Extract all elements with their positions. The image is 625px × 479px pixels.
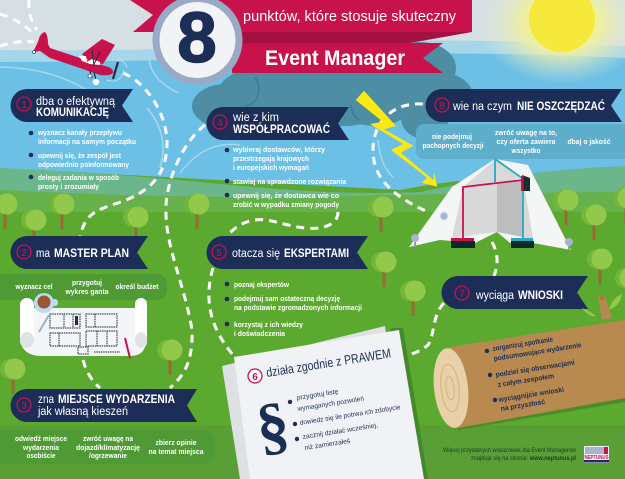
logo: Neptunus (584, 446, 609, 463)
header ribbon bottom (232, 43, 443, 73)
badge: number 8: 8 (177, 0, 217, 78)
section 4 bullets: zrobić w wypadku zmiany pogody (233, 200, 340, 209)
section 6 heading: 6 (252, 372, 258, 383)
section 8 tips: dbaj o jakość (568, 137, 610, 146)
banner 8 (426, 89, 622, 122)
section 7 bullets: zorganizuj spotkanie (492, 335, 554, 353)
header ribbon top (130, 0, 472, 32)
ribbon fold (232, 32, 472, 43)
section 7 bullets (485, 335, 582, 413)
section 3 tips: dojazd/klimatyzację (76, 443, 140, 452)
section 6 heading (248, 345, 392, 383)
icon: paragraph sign: § (251, 388, 294, 463)
section 8 tips: pochopnych decyzji (422, 141, 484, 150)
banner 3: 3 (21, 401, 27, 412)
banner 5: 5 (216, 248, 222, 259)
footer note (443, 448, 577, 462)
section 1 bullets: prosty i zrozumiały (38, 182, 100, 191)
section 7 bullets: z całym zespołem (497, 371, 555, 389)
section 4 bullets (225, 145, 347, 209)
section 3 tips: osobiście (26, 451, 56, 460)
badge: number 8 (152, 0, 242, 85)
section 7 bullets: wyciągnijcie wnioski (497, 385, 565, 404)
banner 2: ma (36, 248, 51, 260)
panel: section 6 paper sheets (222, 326, 428, 479)
section 6 bullets: zacznij działać wcześniej, (302, 422, 378, 441)
logo: Neptunus: NEPTUNUS (584, 455, 609, 461)
illustration: floor plan on table (20, 293, 147, 358)
section 5 bullets: poznaj ekspertów (234, 280, 289, 289)
section 1 bullets: wyznacz kanały przepływu (37, 128, 122, 137)
banner 8: 8 (439, 101, 445, 112)
illustration: wooden log (430, 294, 625, 430)
icon: lightning bolt (356, 91, 437, 187)
section 1 bullets: odpowiednio poinformowany (38, 160, 130, 169)
section 6 bullets: niż zamierzałeś (304, 438, 351, 452)
section 5 bullets: korzystaj z ich wiedzy (234, 320, 304, 329)
banner 5 (207, 236, 368, 269)
section 6 heading: działa zgodnie z PRAWEM (265, 345, 392, 380)
icon: storm cloud (192, 42, 473, 139)
heading: Event Manager: Event Manager (265, 47, 405, 70)
banner 4: 4 (217, 118, 223, 129)
footer note: Więcej przydatnych wskazówek dla Event Managerów (443, 448, 577, 454)
section 1 bullets: deleguj zadania w sposób (38, 173, 119, 182)
banner 1 (11, 89, 133, 122)
banner 2: 2 (21, 248, 27, 259)
section 3 tips: /ogrzewanie (89, 451, 127, 460)
banner 8: NIE OSZCZĘDZAĆ (517, 100, 605, 113)
footer note: znajduje się na stronie: www.neptunus.pl (471, 456, 576, 462)
icon: tent (409, 159, 573, 250)
banner 4: wie z kim (232, 112, 279, 124)
section 5 bullets (225, 280, 362, 338)
section 3 tips: odwiedź miejsce (15, 434, 67, 443)
section 2 tips: określ budżet (116, 282, 159, 291)
section 8 tips: wszystko (511, 146, 541, 155)
section 2 tips (15, 278, 159, 296)
section 7 bullets: podsumowujące wydarzenie (493, 340, 582, 363)
section 1 bullets: informacji na samym początku (38, 137, 136, 146)
icon: sun (529, 0, 595, 52)
section 1 bullets: upewnij się, że zespół jest (38, 151, 122, 160)
section 6 bullets: przygotuj listę (296, 388, 339, 402)
trees (0, 188, 625, 394)
banner 2: MASTER PLAN (54, 248, 129, 260)
banner 4: WSPÓŁPRACOWAĆ (233, 123, 330, 136)
section 7 bullets: na przyszłość (500, 397, 546, 413)
panel: section 8 backdrop (416, 124, 625, 159)
section 5 bullets: podejmuj sam ostateczną decyzję (234, 294, 340, 303)
section 3 tips: zwróć uwagę na (83, 434, 134, 443)
section 3 tips: wydarzenia (22, 443, 60, 452)
section 3 tips: na temat miejsca (148, 447, 204, 456)
banner 7: WNIOSKI (518, 290, 563, 302)
section 2 tips: wykres ganta (65, 287, 109, 296)
section 4 bullets: przestrzegają krajowych (233, 154, 309, 163)
banner 7: wyciąga (475, 290, 515, 302)
banner 1: KOMUNIKACJĘ (36, 107, 109, 119)
section 8 tips (422, 128, 610, 155)
section 6 bullets: wymaganych pozwoleń (296, 396, 365, 413)
section 2 tips: wyznacz cel (15, 282, 53, 291)
section 7 bullets: podziel się obserwacjami (495, 358, 575, 379)
banner 3: MIEJSCE WYDARZENIA (58, 394, 175, 406)
section 8 tips: nie podejmuj (432, 132, 472, 141)
banner 3: jak własną kieszeń (37, 406, 128, 418)
section 5 bullets: na podstawie zgromadzonych informacji (234, 303, 362, 312)
panel: section 2 backdrop (0, 274, 167, 300)
section 4 bullets: wybieraj dostawców, którzy (232, 145, 326, 154)
banner 7 (442, 276, 588, 309)
section 4 bullets: upewnij się, że dostawca wie co (233, 191, 340, 200)
section 6 bullets: dowiedz się ile potrwa ich zdobycie (299, 404, 401, 427)
section 4 bullets: stawiaj na sprawdzone rozwiązania (233, 177, 347, 186)
section 8 tips: czy oferta zawiera (496, 137, 556, 146)
banner 2 (11, 236, 148, 269)
banner 5: otacza się (232, 248, 280, 260)
banner 7: 7 (459, 289, 465, 300)
decorative wind swirls (0, 60, 393, 177)
icon: red plane (32, 32, 127, 85)
heading: subtitle: punktów, które stosuje skuteczny (243, 8, 456, 25)
section 3 tips: zbierz opinie (156, 438, 196, 447)
section 4 bullets: i europejskich wymagań (233, 163, 309, 172)
section 1 bullets (29, 128, 136, 191)
banner 3: zna (38, 394, 55, 406)
banner 8: wie na czym (452, 101, 512, 113)
banner 1: dba o efektywną (36, 96, 116, 108)
paths: dashed flight route (0, 0, 497, 388)
section 8 tips: zwróć uwagę na to, (495, 128, 557, 137)
section 6 bullets (288, 388, 401, 452)
banner 4 (206, 107, 349, 140)
banner 3 (11, 389, 197, 422)
panel: section 3 backdrop (0, 430, 215, 464)
section 5 bullets: i doświadczenia (234, 329, 286, 338)
banner 1: 1 (21, 100, 27, 111)
banner 5: EKSPERTAMI (284, 248, 349, 260)
section 3 tips (15, 434, 204, 460)
section 2 tips: przygotuj (72, 278, 102, 287)
